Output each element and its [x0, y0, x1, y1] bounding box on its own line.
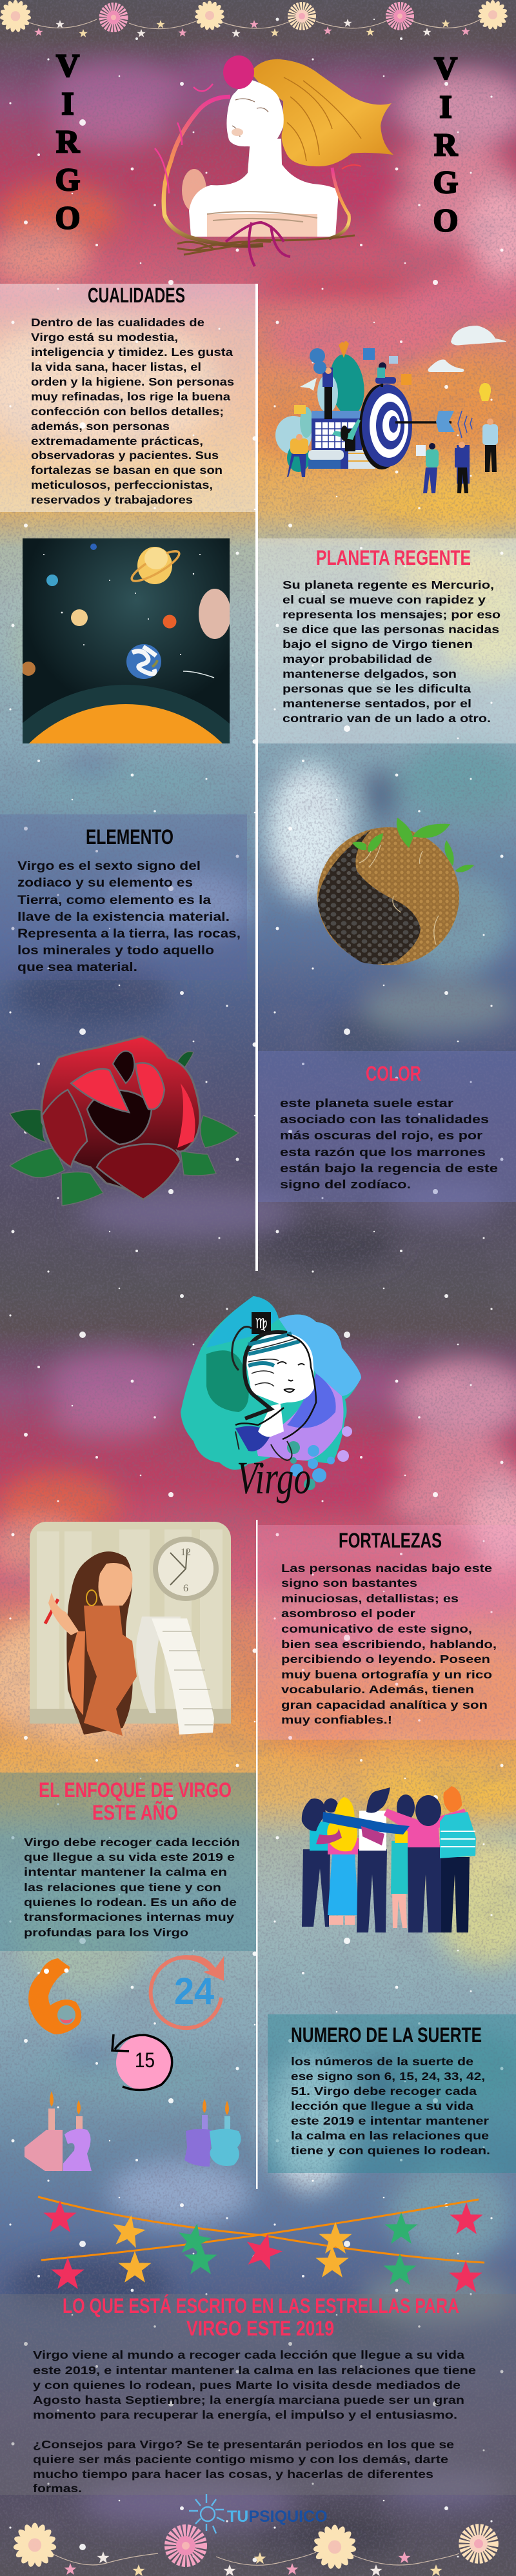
title: virgo script: Virgo	[237, 1452, 311, 1504]
text block: color: están bajo la regencia de este	[280, 1161, 498, 1175]
icon: wall clock	[153, 1537, 219, 1601]
heading: color: COLOR	[366, 1062, 421, 1085]
panel: lo que esta escrito en las estrellas	[0, 2294, 516, 2495]
vertical title left: VIRGO: G	[55, 161, 80, 197]
text block: numero de la suerte: tiene y con quienes lo rodean.	[291, 2144, 490, 2157]
text block: numero de la suerte: los números de la suerte de	[291, 2055, 473, 2068]
text block: elemento: los minerales y todo aquello	[17, 943, 214, 958]
text block: cualidades: además, son personas	[31, 420, 170, 433]
text block: planeta regente: Su planeta regente es Mercurio,	[283, 578, 494, 591]
text block: cualidades: observadoras y pacientes. Sus	[31, 449, 219, 462]
heading: cualidades: CUALIDADES	[88, 284, 185, 307]
text block: numero de la suerte: 51. Virgo debe recoger cada	[291, 2085, 477, 2098]
text block: cualidades	[31, 316, 234, 506]
panel: el enfoque de virgo	[0, 1773, 256, 1951]
text block: enfoque: profundas para los Virgo	[24, 1926, 188, 1939]
text block: cualidades: meticulosos, perfeccionistas,	[31, 478, 213, 491]
icon: wall clock: 6	[183, 1583, 188, 1594]
number icon: 33 birthday candles	[184, 2099, 241, 2167]
number icon: 42 birthday candles	[25, 2091, 92, 2171]
text block: elemento: Virgo es el sexto signo del	[17, 859, 201, 873]
text block: elemento: Representa a la tierra, las rocas,	[17, 927, 241, 941]
icon: saturn	[130, 547, 181, 584]
text block: fortalezas: signo son bastantes	[281, 1577, 417, 1589]
icon: zodiac card	[252, 1312, 271, 1334]
text block: planeta regente: mantenerse delgados, son	[283, 667, 457, 680]
text block: fortalezas: vocabulario. Además, tienen	[281, 1683, 474, 1696]
illustration: group of friends hugging	[302, 1786, 476, 1932]
text block: elemento: Tierra, como elemento es la	[17, 893, 211, 907]
text block: cualidades: Dentro de las cualidades de	[31, 316, 204, 329]
vertical title right: VIRGO: I	[439, 88, 452, 124]
text block: estrellas: y con quienes lo rodean, pues Marte lo visita desde mediados de	[33, 2379, 461, 2392]
vertical title right: VIRGO: V	[434, 50, 457, 86]
vertical title left: VIRGO: I	[61, 85, 74, 121]
text block: cualidades: reservados y trabajadores	[31, 493, 193, 506]
heading: estrellas: VIRGO ESTE 2019	[186, 2317, 334, 2340]
icon: small orange planet	[21, 662, 35, 676]
text block: enfoque: Virgo debe recoger cada lección	[24, 1836, 240, 1849]
icon: mars	[163, 615, 177, 628]
illustration: dark red rose with leaves	[10, 1036, 239, 1206]
panel: elemento	[0, 814, 247, 980]
icon: blue planet	[46, 575, 58, 586]
panel: planeta regente	[258, 538, 516, 743]
text block: fortalezas: minuciosas, detallistas; es	[281, 1592, 459, 1605]
illustration: earth ball with sprouts	[317, 818, 474, 965]
text block: estrellas: Agosto hasta Septiembre; la energía marciana puede ser un gran	[33, 2394, 464, 2406]
text block: estrellas: mucho tiempo para hacer las cosas, y hacerlas de diferentes	[33, 2468, 433, 2481]
center divider line: lower	[256, 1520, 258, 2189]
vertical title right: VIRGO: G	[433, 164, 458, 200]
text block: color: signo del zodíaco.	[280, 1177, 411, 1191]
panel: color	[258, 1051, 516, 1202]
text block: planeta regente: mayor probabilidad de	[283, 653, 432, 665]
text block: elemento: llave de la existencia material.	[17, 910, 230, 924]
text block: planeta regente: mantenerse sentados, por el	[283, 697, 471, 710]
text block: fortalezas: muy confiables.!	[281, 1713, 392, 1726]
vertical title left: VIRGO: R	[56, 123, 80, 159]
number icon: 15 in pink circle: 15	[135, 2049, 155, 2072]
text block: fortalezas	[281, 1562, 497, 1726]
text block: cualidades: Virgo está su modestia,	[31, 331, 178, 344]
text block: estrellas: este 2019, e intentar mantener la calma en las relaciones que tiene	[33, 2364, 476, 2377]
text block: enfoque	[24, 1836, 240, 1939]
heading: estrellas	[63, 2294, 459, 2340]
text block: numero de la suerte	[291, 2055, 490, 2157]
text block: cualidades: orden y la higiene. Son personas	[31, 375, 234, 388]
text block: estrellas: momento para recuperar la energía, el impulso y el entusiasmo.	[33, 2408, 457, 2421]
heading: fortalezas: FORTALEZAS	[339, 1529, 442, 1552]
panel: fortalezas	[258, 1525, 516, 1740]
center divider line: upper	[255, 284, 258, 1271]
icon: wall clock: 12	[181, 1547, 191, 1558]
text block: planeta regente	[283, 578, 501, 725]
illustration: planets in space	[23, 538, 230, 743]
illustration: virgo woman on watercolor blob	[181, 1296, 361, 1504]
heading: planeta regente: PLANETA REGENTE	[316, 546, 471, 569]
text block: elemento	[17, 859, 241, 974]
vertical title left: VIRGO	[55, 47, 80, 235]
vertical title right: VIRGO	[433, 50, 458, 238]
text block: cualidades: confección con bellos detalles;	[31, 405, 224, 418]
text block: elemento: que sea material.	[17, 960, 137, 974]
panel: cualidades	[0, 284, 257, 512]
text block: enfoque: las relaciones que tiene y con	[24, 1881, 221, 1894]
text block: color: más oscuras del rojo, es por	[280, 1128, 482, 1142]
text block: cualidades: muy refinadas, los rige la buena	[31, 390, 230, 403]
text block: enfoque: transformaciones internas muy	[24, 1911, 234, 1923]
text block: cualidades: fortalezas se basan en que son	[31, 464, 223, 477]
text block: enfoque: quienes lo rodean. Es un año de	[24, 1896, 237, 1909]
bottom garland of flowers and stars	[13, 2522, 492, 2576]
text block: planeta regente: el cual se mueve con rapidez y	[283, 593, 486, 606]
text block: numero de la suerte: lección que llegue a su vida	[291, 2099, 473, 2112]
heading: elemento: ELEMENTO	[86, 825, 174, 849]
text block: planeta regente: se dice que las personas nacidas	[283, 623, 499, 636]
text block: color: este planeta suele estar	[280, 1096, 453, 1110]
text block: planeta regente: contrario van de un lado a otro.	[283, 712, 491, 725]
icon: zodiac card: ♍	[255, 1316, 268, 1332]
logo: tupsiquico: TUPSIQUICO	[227, 2508, 328, 2526]
text block: numero de la suerte: la calma en las relaciones que	[291, 2129, 489, 2142]
illustration: blonde woman with ribbons	[155, 55, 393, 266]
text block: estrellas: quiere ser más paciente contigo mismo y con los demás, darte	[33, 2453, 448, 2466]
heading: el enfoque de virgo este año: ESTE AÑO	[92, 1801, 178, 1824]
text block: color: esta razón que los marrones	[280, 1145, 486, 1159]
vertical title left: VIRGO: V	[56, 47, 79, 83]
text block: enfoque: que llegue a su vida este 2019 e	[24, 1851, 235, 1863]
text block: numero de la suerte: ese signo son 6, 15, 24, 33, 42,	[291, 2070, 485, 2083]
text block: fortalezas: Las personas nacidas bajo este	[281, 1562, 492, 1575]
text block: cualidades: la vida sana, hacer listas, el	[31, 360, 201, 373]
illustration: target with arrow and team	[275, 326, 506, 493]
heading: el enfoque de virgo este año	[39, 1778, 232, 1824]
number icon: 24 with circular arrow: 24	[174, 1971, 214, 2012]
text block: cualidades: inteligencia y timidez. Les gusta	[31, 346, 233, 359]
text block: fortalezas: bien sea escribiendo, hablando,	[281, 1638, 497, 1651]
vertical title right: VIRGO: R	[434, 126, 458, 162]
heading: el enfoque de virgo este año: EL ENFOQUE DE VIRGO	[39, 1778, 232, 1802]
icon: earth	[126, 644, 161, 679]
text block: fortalezas: percibiendo o leyendo. Poseen	[281, 1653, 490, 1666]
number icon: 15 in pink circle	[112, 2034, 173, 2090]
text block: elemento: zodiaco y su elemento es	[17, 876, 193, 890]
number icon: orange six	[28, 1958, 81, 2034]
icon: sun	[29, 704, 223, 743]
text block: estrellas: ¿Consejos para Virgo? Se te presentarán periodos en los que se	[33, 2438, 454, 2451]
text block: estrellas: formas.	[33, 2482, 82, 2495]
text block: fortalezas: muy buena ortografía y un rico	[281, 1668, 492, 1681]
panel: numero de la suerte	[268, 2014, 516, 2173]
text block: cualidades: extremadamente prácticas,	[31, 435, 203, 447]
text block: planeta regente: bajo el signo de Virgo tienen	[283, 638, 473, 651]
text block: estrellas	[33, 2348, 476, 2495]
text block: color	[280, 1096, 498, 1191]
text block: fortalezas: asombroso el poder	[281, 1607, 415, 1620]
vertical title left: VIRGO: O	[55, 199, 80, 235]
text block: color: asociado con las tonalidades	[280, 1112, 489, 1126]
logo: tupsiquico	[189, 2494, 328, 2533]
text block: enfoque: intentar mantener la calma en	[24, 1865, 227, 1878]
text block: fortalezas: gran capacidad analítica y son	[281, 1698, 488, 1711]
text block: estrellas: Virgo viene al mundo a recoger cada lección que llegue a su vida	[33, 2348, 464, 2361]
illustration: woman checking a long list	[30, 1522, 231, 1736]
text block: numero de la suerte: este 2019 e intentar mantener	[291, 2114, 489, 2127]
icon: small blue planet	[90, 544, 97, 550]
icon: jupiter	[199, 589, 231, 639]
text block: planeta regente: representa los mensajes; por eso	[283, 608, 501, 621]
text block: planeta regente: personas que se les dificulta	[283, 682, 471, 695]
top garland of flowers and stars	[0, 0, 508, 37]
vertical title right: VIRGO: O	[433, 202, 458, 238]
icon: venus	[71, 609, 88, 626]
number icon: 24 with circular arrow	[151, 1955, 224, 2028]
illustration: strings of hanging stars	[38, 2197, 484, 2292]
text block: fortalezas: comunicativo de este signo,	[281, 1622, 472, 1635]
